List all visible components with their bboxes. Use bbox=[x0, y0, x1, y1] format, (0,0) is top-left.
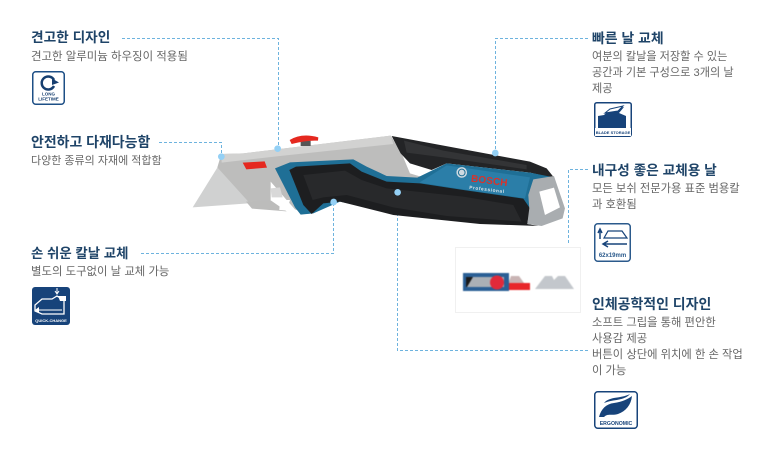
text: safe and versatile: 다양한 종류의 자재에 적합함 bbox=[31, 155, 162, 167]
icon: ergonomic bbox=[594, 391, 638, 429]
Bosch logo: BOSCH bbox=[470, 174, 508, 189]
icon: long lifetime: LIFETIME bbox=[38, 96, 59, 102]
red slider bbox=[243, 161, 267, 169]
heading: safe and versatile: 안전하고 다재다능함 bbox=[31, 134, 150, 150]
black soft grip bbox=[289, 163, 538, 226]
text: ergonomic design: 사용감 제공 bbox=[592, 333, 647, 345]
silver housing bbox=[217, 136, 423, 214]
grey end cap bbox=[527, 176, 565, 226]
heading: sturdy design: 견고한 디자인 bbox=[31, 30, 110, 45]
text: durable blades bbox=[592, 182, 740, 211]
text: quick blade swap: 제공 bbox=[592, 83, 612, 95]
heading: quick blade swap: 빠른 날 교체 bbox=[592, 30, 664, 46]
panel: blade product photo bbox=[455, 247, 581, 313]
text: quick blade swap: 공간과 기본 구성으로 3개의 날 bbox=[592, 67, 734, 79]
text: ergonomic design: 버튼이 상단에 위치에 한 손 작업 bbox=[592, 349, 743, 361]
blade dispenser bbox=[463, 273, 530, 291]
icon: quick change: QUICK-CHANGE bbox=[35, 318, 67, 323]
Bosch logo bbox=[454, 167, 509, 194]
text: durable blades: 과 호환됨 bbox=[592, 199, 637, 211]
text: ergonomic design: 이 가능 bbox=[592, 365, 626, 377]
red thumb wheel bbox=[290, 136, 318, 146]
icon: long lifetime bbox=[32, 71, 65, 105]
blue handle bbox=[275, 159, 554, 220]
icon: blade size: 62x19mm bbox=[599, 253, 626, 259]
knife blade bbox=[193, 166, 252, 207]
heading: ergonomic design: 인체공학적인 디자인 bbox=[592, 296, 711, 312]
text: quick blade swap: 여분의 칼날을 저장할 수 있는 bbox=[592, 51, 727, 63]
icon: long lifetime: LONG bbox=[42, 92, 55, 96]
text: quick blade swap bbox=[592, 50, 734, 95]
spare blade bbox=[535, 276, 574, 289]
icon: quick change bbox=[32, 287, 70, 325]
text: easy blade change: 별도의 도구없이 날 교체 가능 bbox=[31, 266, 169, 278]
text: ergonomic design: 소프트 그립을 통해 편안한 bbox=[592, 317, 716, 329]
icon: blade storage: BLADE STORAGE bbox=[596, 130, 631, 135]
black top grip bbox=[392, 136, 555, 178]
icon: blade storage bbox=[594, 102, 632, 137]
text: durable blades: 모든 보쉬 전문가용 표준 범용칼 bbox=[592, 183, 740, 195]
text: sturdy design: 견고한 알루미늄 하우징이 적용됨 bbox=[31, 51, 188, 63]
icon: ergonomic: ERGONOMIC bbox=[600, 421, 633, 427]
text: ergonomic design bbox=[592, 316, 743, 377]
callout dots bbox=[218, 145, 499, 205]
heading: durable blades: 내구성 좋은 교체용 날 bbox=[592, 163, 717, 178]
heading: easy blade change: 손 쉬운 칼날 교체 bbox=[31, 246, 128, 261]
Bosch logo: Professional bbox=[469, 185, 504, 194]
icon: blade size bbox=[594, 223, 631, 262]
